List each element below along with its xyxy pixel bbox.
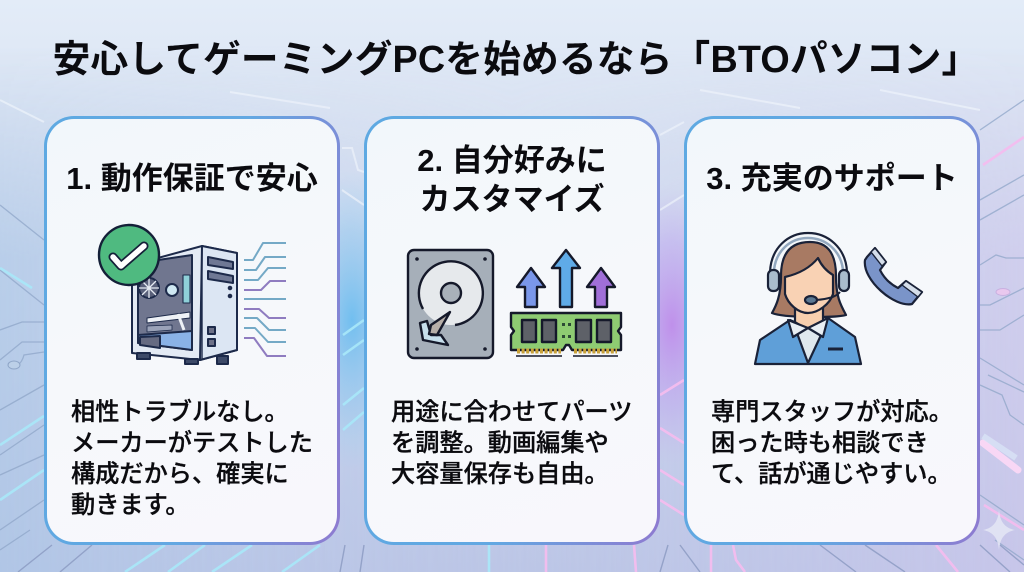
heading: 3: 3. 充実のサポート [706, 161, 958, 196]
icon: sparkle watermark [984, 512, 1014, 549]
body text 1: 動きます。 [71, 492, 190, 519]
icon: green check badge [99, 225, 159, 285]
body text 2: 用途に合わせてパーツ [391, 399, 632, 426]
body text 1: 相性トラブルなし。 [71, 399, 289, 426]
body text 2 [391, 399, 632, 488]
body text 2: 大容量保存も自由。 [391, 461, 609, 488]
panel: 充実のサポート [684, 116, 980, 545]
heading: 1: 1. 動作保証で安心 [66, 161, 318, 196]
body text 1: 構成だから、確実に [71, 461, 289, 488]
body text 2: を調整。動画編集や [391, 430, 609, 457]
panel: 動作保証で安心 [44, 116, 340, 545]
icon: hard disk and memory with arrows [406, 248, 622, 360]
icon: phone receiver [865, 248, 922, 304]
panel: 自分好みにカスタマイズ [364, 116, 660, 545]
icon: PC case with check mark [98, 224, 286, 365]
body text 3: 困った時も相談でき [711, 430, 929, 457]
body text 3 [711, 398, 953, 488]
body text 3: て、話が通じやすい。 [711, 461, 952, 488]
body text 1 [71, 398, 313, 519]
icon: support operator with phone [754, 232, 924, 366]
body text 3: 専門スタッフが対応。 [711, 399, 953, 426]
heading: 2: 2. 自分好みに [417, 143, 607, 178]
heading: 2: カスタマイズ [419, 182, 605, 217]
title: 安心してゲーミングPCを始めるなら「BTOパソコン」 [53, 38, 979, 80]
heading: 2 [417, 143, 607, 217]
body text 1: メーカーがテストした [71, 430, 313, 457]
